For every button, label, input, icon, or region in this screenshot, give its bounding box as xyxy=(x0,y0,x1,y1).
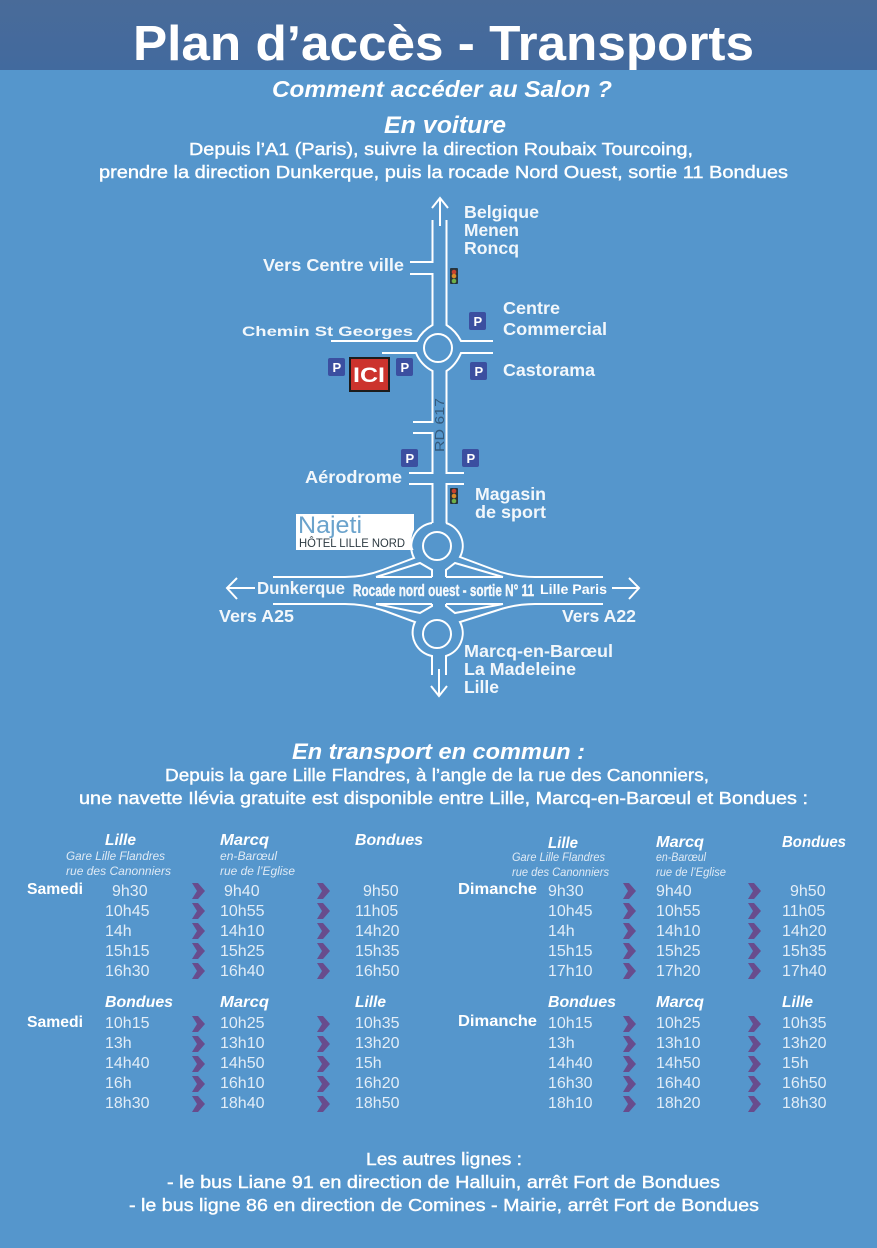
timetable: Sunday outbound: 14h10 xyxy=(656,923,701,940)
timetable: Sunday outbound: Marcq xyxy=(656,834,704,851)
timetable: Sunday return: 16h30 xyxy=(548,1075,593,1092)
timetable: Saturday return: 10h15 xyxy=(105,1015,150,1032)
timetable: Sunday outbound: Gare Lille Flandres xyxy=(512,850,605,864)
timetable: Saturday return: 16h10 xyxy=(220,1075,265,1092)
timetable: Saturday return: 16h20 xyxy=(355,1075,400,1092)
timetable: Saturday outbound: en-Barœul xyxy=(220,849,277,863)
header band xyxy=(0,0,877,70)
timetable: Saturday return: 15h xyxy=(355,1055,382,1072)
timetable: Saturday outbound: 16h30 xyxy=(105,963,150,980)
map labels: Belgique xyxy=(464,202,539,222)
timetable: Saturday outbound: 9h50 xyxy=(363,883,399,900)
timetable: Saturday outbound: 16h40 xyxy=(220,963,265,980)
parking signs: P xyxy=(474,314,482,329)
timetable: Saturday outbound xyxy=(27,832,423,980)
timetable: Sunday return: 18h30 xyxy=(782,1095,827,1112)
timetable: Saturday outbound: rue de l’Eglise xyxy=(220,864,295,878)
traffic light south xyxy=(450,488,458,504)
public transport description: Depuis la gare Lille Flandres, à l’angle de la rue des Canonniers, xyxy=(165,765,709,785)
heading: by car: En voiture xyxy=(384,112,506,139)
timetable: Saturday return: 13h xyxy=(105,1035,132,1052)
directions by car: prendre la direction Dunkerque, puis la rocade Nord Ouest, sortie 11 Bondues xyxy=(99,162,788,182)
other bus lines: - le bus ligne 86 en direction de Comines - Mairie, arrêt Fort de Bondues xyxy=(129,1195,759,1215)
timetable: Saturday outbound: Lille xyxy=(105,832,136,849)
timetable: Saturday outbound: rue des Canonniers xyxy=(66,864,171,878)
other bus lines: Les autres lignes : xyxy=(366,1149,522,1169)
heading: public transport: En transport en commun : xyxy=(292,739,585,764)
map labels: Roncq xyxy=(464,238,519,258)
timetable: Saturday outbound: 11h05 xyxy=(355,903,398,920)
directions by car xyxy=(99,139,788,182)
directions by car: Depuis l’A1 (Paris), suivre la direction Roubaix Tourcoing, xyxy=(189,139,693,159)
ICI marker xyxy=(350,358,389,391)
map labels: Vers Centre ville xyxy=(263,255,404,275)
timetable: Saturday return: 14h50 xyxy=(220,1055,265,1072)
timetable: Sunday outbound: 10h55 xyxy=(656,903,701,920)
map labels: Lille Paris xyxy=(540,582,607,597)
timetable: Saturday return: Marcq xyxy=(220,994,269,1011)
road label RD 617: RD 617 xyxy=(432,398,447,452)
timetable: Sunday outbound: 17h10 xyxy=(548,963,593,980)
map labels xyxy=(219,202,636,697)
arrow: north xyxy=(432,198,448,226)
timetable: Saturday return: 14h40 xyxy=(105,1055,150,1072)
timetable: Saturday return xyxy=(27,994,400,1112)
timetable: Sunday outbound: 15h15 xyxy=(548,943,593,960)
ICI marker: ICI xyxy=(353,364,385,387)
parking signs: P xyxy=(332,360,342,375)
other bus lines xyxy=(129,1149,759,1215)
timetable: Sunday return: 10h25 xyxy=(656,1015,701,1032)
timetable: Sunday return: 14h40 xyxy=(548,1055,593,1072)
timetable: Saturday outbound: 14h xyxy=(105,923,132,940)
traffic light north xyxy=(450,268,458,284)
timetable: Sunday outbound: 11h05 xyxy=(782,903,825,920)
hotel logo xyxy=(296,512,414,550)
timetable: Saturday outbound: 14h20 xyxy=(355,923,400,940)
map labels: Menen xyxy=(464,220,519,240)
timetable: Sunday outbound: 14h20 xyxy=(782,923,827,940)
timetable: Sunday outbound: 15h25 xyxy=(656,943,701,960)
timetable: Saturday return: 16h xyxy=(105,1075,132,1092)
timetable: Sunday outbound: 14h xyxy=(548,923,575,940)
timetable: Sunday outbound: Dimanche xyxy=(458,881,537,898)
map labels: Centre xyxy=(503,298,560,318)
map labels: La Madeleine xyxy=(464,659,576,679)
map labels: Rocade nord ouest - sortie N° 11 xyxy=(353,581,534,600)
timetable: Saturday outbound: 9h40 xyxy=(224,883,260,900)
map labels: de sport xyxy=(475,502,546,522)
map labels: Castorama xyxy=(503,360,595,380)
roads xyxy=(273,220,603,675)
map labels: Chemin St Georges xyxy=(242,324,413,339)
timetable: Saturday return: 10h35 xyxy=(355,1015,400,1032)
timetable: Saturday outbound: 14h10 xyxy=(220,923,265,940)
hotel logo: HÔTEL LILLE NORD xyxy=(299,535,405,550)
timetable: Sunday outbound: 10h45 xyxy=(548,903,593,920)
parking signs: P xyxy=(474,364,484,379)
timetable: Saturday return: 13h10 xyxy=(220,1035,265,1052)
timetable: Sunday return: 18h10 xyxy=(548,1095,593,1112)
hotel logo: Najeti xyxy=(298,512,362,539)
timetable: Sunday outbound: 17h40 xyxy=(782,963,827,980)
timetable: Sunday outbound: 9h50 xyxy=(790,883,826,900)
arrow: east xyxy=(612,578,639,599)
parking signs: P xyxy=(400,360,410,375)
timetable: Saturday return: 18h50 xyxy=(355,1095,400,1112)
timetable: Sunday outbound: 17h20 xyxy=(656,963,701,980)
timetable: Sunday return: Dimanche xyxy=(458,1013,537,1030)
timetable: Sunday return: 13h10 xyxy=(656,1035,701,1052)
timetable: Sunday return: 10h15 xyxy=(548,1015,593,1032)
map labels: Vers A22 xyxy=(562,606,636,626)
timetable: Saturday outbound: 10h55 xyxy=(220,903,265,920)
arrow: west xyxy=(227,578,255,599)
timetable: Sunday return: 14h50 xyxy=(656,1055,701,1072)
map labels: Aérodrome xyxy=(305,467,402,487)
timetable: Sunday return: 16h40 xyxy=(656,1075,701,1092)
timetable: Sunday return: 16h50 xyxy=(782,1075,827,1092)
parking signs xyxy=(328,312,487,467)
public transport description xyxy=(79,765,808,808)
timetable: Saturday outbound: Marcq xyxy=(220,832,269,849)
timetable: Saturday outbound: Samedi xyxy=(27,881,83,898)
timetable: Saturday return: Samedi xyxy=(27,1014,83,1031)
road map xyxy=(219,198,639,697)
arrow: south xyxy=(431,669,447,696)
timetable: Sunday return: 18h20 xyxy=(656,1095,701,1112)
timetable: Sunday outbound: rue de l’Eglise xyxy=(656,865,726,879)
timetable: Sunday return: 13h xyxy=(548,1035,575,1052)
timetable: Saturday return: 18h40 xyxy=(220,1095,265,1112)
timetable: Saturday return: 10h25 xyxy=(220,1015,265,1032)
timetable: Saturday outbound: 10h45 xyxy=(105,903,150,920)
timetable: Sunday outbound: 9h40 xyxy=(656,883,692,900)
timetable: Sunday return: 15h xyxy=(782,1055,809,1072)
subtitle: Comment accéder au Salon ? xyxy=(272,76,612,102)
timetable: Saturday outbound: Bondues xyxy=(355,832,423,849)
timetable: Sunday outbound xyxy=(458,834,846,980)
timetable: Sunday return: 13h20 xyxy=(782,1035,827,1052)
timetable: Sunday outbound: en-Barœul xyxy=(656,850,706,864)
timetable: Sunday outbound: 9h30 xyxy=(548,883,584,900)
timetable: Sunday return: Marcq xyxy=(656,994,704,1011)
timetable: Sunday outbound: rue des Canonniers xyxy=(512,865,609,879)
parking signs: P xyxy=(466,451,476,466)
timetable: Saturday outbound: 15h25 xyxy=(220,943,265,960)
map labels: Vers A25 xyxy=(219,606,294,626)
timetable: Sunday outbound: Lille xyxy=(548,835,578,852)
timetable: Saturday return: Lille xyxy=(355,994,386,1011)
timetable: Saturday return: 13h20 xyxy=(355,1035,400,1052)
timetable: Sunday return: Lille xyxy=(782,994,813,1011)
timetable: Sunday outbound: Bondues xyxy=(782,834,846,851)
map labels: Magasin xyxy=(475,484,546,504)
timetable: Saturday outbound: 16h50 xyxy=(355,963,400,980)
timetable: Sunday return xyxy=(458,994,827,1112)
map labels: Dunkerque xyxy=(257,578,345,598)
timetable: Saturday return: Bondues xyxy=(105,994,173,1011)
timetable: Saturday return: 18h30 xyxy=(105,1095,150,1112)
timetable: Sunday return: 10h35 xyxy=(782,1015,827,1032)
map labels: Marcq-en-Barœul xyxy=(464,641,613,661)
parking signs: P xyxy=(406,451,414,466)
map labels: Lille xyxy=(464,677,499,697)
timetable: Sunday outbound: 15h35 xyxy=(782,943,827,960)
title: Plan d’accès - Transports xyxy=(133,17,754,71)
timetable: Sunday return: Bondues xyxy=(548,994,616,1011)
map labels: Commercial xyxy=(503,319,607,339)
timetable: Saturday outbound: 15h35 xyxy=(355,943,400,960)
public transport description: une navette Ilévia gratuite est disponible entre Lille, Marcq-en-Barœul et Bondues : xyxy=(79,788,808,808)
timetable: Saturday outbound: 9h30 xyxy=(112,883,148,900)
timetable: Saturday outbound: Gare Lille Flandres xyxy=(66,849,165,863)
other bus lines: - le bus Liane 91 en direction de Halluin, arrêt Fort de Bondues xyxy=(167,1172,720,1192)
timetable: Saturday outbound: 15h15 xyxy=(105,943,150,960)
